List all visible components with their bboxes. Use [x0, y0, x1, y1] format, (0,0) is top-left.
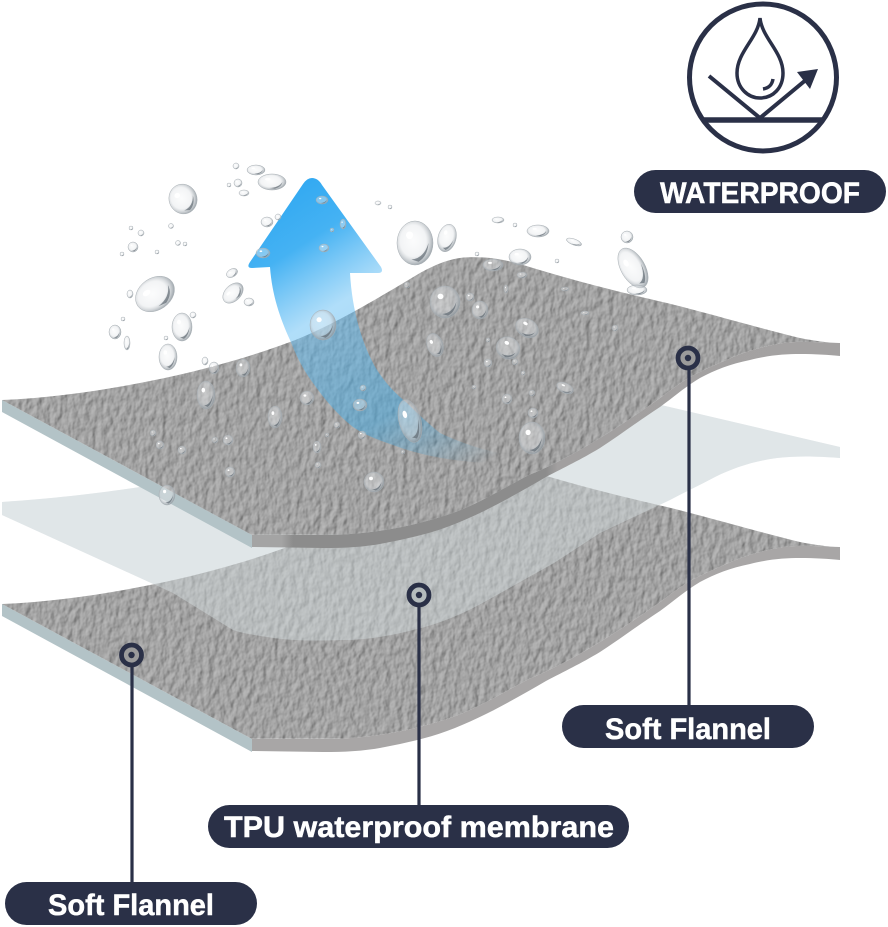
callout: upper soft flannel marker and leader: [678, 348, 698, 706]
bottom flannel surface: [2, 461, 840, 739]
water droplets: [109, 163, 654, 505]
label: TPU waterproof membrane: TPU waterproof membrane: [224, 811, 614, 844]
top flannel side band: [252, 342, 840, 548]
top flannel surface: [2, 257, 840, 535]
label: Soft Flannel right: Soft Flannel: [605, 713, 771, 746]
bottom flannel front edge: [2, 604, 252, 752]
label: Soft Flannel left: [5, 882, 257, 925]
callout: membrane marker and leader: [409, 585, 429, 806]
icon: waterproof badge: [690, 4, 836, 151]
label: WATERPROOF: [634, 170, 886, 213]
icon: blue arrow rising through fabric: [248, 178, 517, 463]
bottom flannel side band: [252, 546, 840, 752]
membrane base on white: [2, 405, 840, 641]
layer: TPU waterproof membrane: [2, 405, 840, 641]
label: TPU waterproof membrane: [208, 805, 629, 848]
label: WATERPROOF: WATERPROOF: [660, 177, 860, 210]
layer: bottom soft flannel: [2, 405, 840, 752]
callout: lower soft flannel marker and leader: [122, 645, 142, 883]
label: Soft Flannel right: [562, 705, 814, 748]
top flannel front edge: [2, 400, 252, 548]
layer: top soft flannel: [2, 257, 840, 548]
label: Soft Flannel left: Soft Flannel: [48, 889, 214, 922]
